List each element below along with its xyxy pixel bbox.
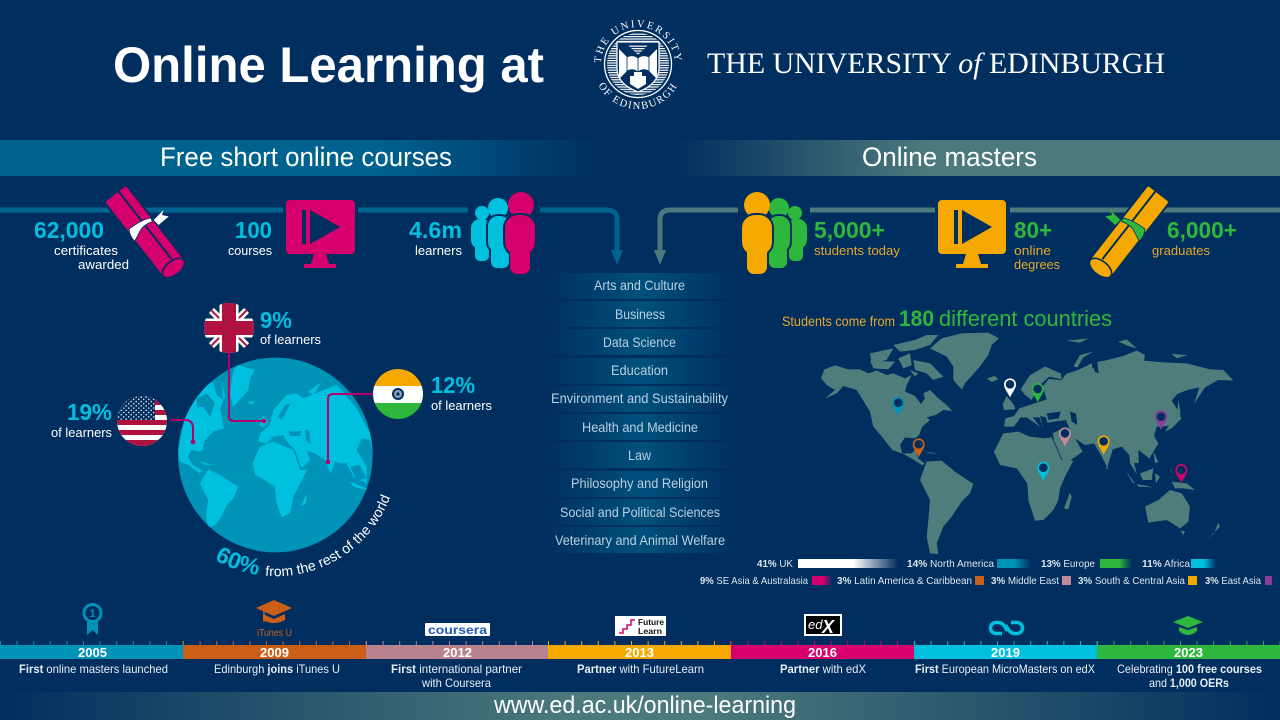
legend: student regions xyxy=(700,558,1272,587)
stat: 5,000+ students today: 5,000+ xyxy=(814,217,885,243)
icon: India flag xyxy=(373,369,423,419)
label: 19% of learners: 19% xyxy=(67,399,112,425)
milestone: 2005 xyxy=(0,645,183,676)
icon: group of three people, orange and green xyxy=(738,188,810,278)
panel: subject list: Social and Political Sciences xyxy=(560,504,720,520)
panel: subject list xyxy=(547,273,735,553)
panel: subject list: Education xyxy=(611,362,668,378)
icon: iTunes U cap xyxy=(256,600,292,639)
connector: UK to globe xyxy=(229,353,266,423)
milestone: 2016: Partner with edX xyxy=(780,662,866,676)
stat: 100 courses xyxy=(228,217,272,258)
legend: student regions: 41% UK xyxy=(757,558,793,570)
pin: Middle East xyxy=(1059,427,1071,447)
milestone: 2009 xyxy=(183,645,366,676)
legend: student regions: 9% SE Asia & Australasia xyxy=(700,575,808,587)
stat: 100 courses: courses xyxy=(228,243,272,258)
legend: student regions: 11% Africa xyxy=(1142,558,1190,570)
icon: pink diploma scroll xyxy=(103,175,200,284)
curved label: 60% from the rest of the world: 60% from the rest of the world xyxy=(217,494,390,576)
milestone: 2012: 2012 xyxy=(443,645,472,660)
stat: 62,000 certificates awarded: 62,000 xyxy=(34,217,104,243)
label: 9% of learners xyxy=(260,307,321,347)
milestone: 2005: 2005 xyxy=(78,645,107,660)
stat: 6,000+ graduates xyxy=(1152,217,1237,258)
banner: Free short online courses: Free short online courses xyxy=(160,142,452,172)
banner: Online masters xyxy=(675,140,1280,176)
milestone: 2009: 2009 xyxy=(260,645,289,660)
legend: student regions: 14% North America xyxy=(907,558,994,570)
milestone: 2019 xyxy=(914,645,1097,676)
icon: pink monitor with play button xyxy=(283,197,358,268)
heading: students come from 180 different countries: Students come from xyxy=(782,313,895,329)
stat: 5,000+ students today: students today xyxy=(814,243,901,258)
label: 9% of learners: of learners xyxy=(260,332,321,347)
label: 12% of learners xyxy=(431,372,492,413)
banner: Free short online courses xyxy=(0,140,600,176)
logo: FutureLearn xyxy=(615,616,666,636)
world map: Americas and Greenland xyxy=(821,333,999,554)
label: 9% of learners: 9% xyxy=(260,307,292,333)
pin: East Asia xyxy=(1155,411,1167,430)
stat: 5,000+ students today xyxy=(814,217,901,258)
panel: subject list: Data Science xyxy=(603,334,676,350)
logo: edX: X xyxy=(821,617,835,637)
location pins xyxy=(892,378,1187,483)
icon: orange monitor with play button xyxy=(935,197,1010,268)
icon: chain link xyxy=(990,622,1023,634)
heading: students come from 180 different countries xyxy=(782,306,1112,331)
logo: edX xyxy=(804,614,842,637)
legend: student regions: 13% Europe xyxy=(1041,558,1095,570)
panel: subject list: Environment and Sustainability xyxy=(551,390,728,406)
icon: medal ribbon xyxy=(84,604,101,635)
logo: University of Edinburgh crest xyxy=(594,20,682,109)
title: Online Learning at: Online Learning at xyxy=(113,37,544,93)
stat: 4.6m learners: learners xyxy=(415,243,462,258)
stat: 80+ online degrees: degrees xyxy=(1014,257,1060,272)
stat: 62,000 certificates awarded xyxy=(34,217,129,272)
label: 19% of learners xyxy=(51,399,112,440)
milestone: 2013: 2013 xyxy=(625,645,654,660)
milestone: 2013 xyxy=(548,645,731,676)
stat: 80+ online degrees: online xyxy=(1014,243,1051,258)
banner: Online masters: Online masters xyxy=(862,142,1037,172)
icon: group of three people, cyan and pink xyxy=(468,188,540,278)
panel: subject list: Law xyxy=(628,447,652,463)
icon: orange diploma scroll xyxy=(1074,175,1171,284)
timeline xyxy=(0,600,1280,690)
label: 12% of learners: of learners xyxy=(431,398,492,413)
arrow: online masters line into subject list xyxy=(654,210,1280,265)
footer: website link: www.ed.ac.uk/online-learning xyxy=(493,692,796,719)
stat: 6,000+ graduates: 6,000+ xyxy=(1167,217,1237,243)
logo: FutureLearn: Learn xyxy=(638,627,662,636)
panel: subject list: Arts and Culture xyxy=(594,277,685,293)
icon: medal ribbon: 1 xyxy=(89,608,96,620)
milestone: 2012 xyxy=(366,645,548,690)
heading: students come from 180 different countries: different countries xyxy=(939,306,1112,331)
logo: FutureLearn: Future xyxy=(638,618,665,627)
stat: 62,000 certificates awarded: awarded xyxy=(78,257,129,272)
logo: University of Edinburgh crest: THE UNIVERSITY xyxy=(594,20,682,62)
milestone: 2005: First online masters launched xyxy=(19,662,168,676)
panel: subject list: Veterinary and Animal Welfare xyxy=(555,532,725,548)
milestone: 2023: 2023 xyxy=(1174,645,1203,660)
pin: North America xyxy=(892,397,904,416)
stat: 6,000+ graduates: graduates xyxy=(1152,243,1210,258)
stat: 80+ online degrees xyxy=(1014,217,1060,272)
stat: 80+ online degrees: 80+ xyxy=(1014,217,1052,243)
stat: 62,000 certificates awarded: certificates xyxy=(54,243,119,258)
connector: USA to globe xyxy=(170,420,195,444)
logo: University of Edinburgh crest: OF EDINBURGH xyxy=(600,82,677,109)
label: 19% of learners: of learners xyxy=(51,425,112,440)
panel: subject list: Business xyxy=(615,306,665,322)
footer: website link xyxy=(0,692,1280,720)
pin: Africa xyxy=(1037,462,1049,481)
panel: subject list: Health and Medicine xyxy=(582,419,698,435)
milestone: 2013: Partner with FutureLearn xyxy=(577,662,704,676)
panel: subject list: Philosophy and Religion xyxy=(571,475,708,491)
milestone: 2016: 2016 xyxy=(808,645,837,660)
stat: 4.6m learners: 4.6m xyxy=(409,217,462,243)
milestone: 2009: Edinburgh joins iTunes U xyxy=(214,662,340,676)
stat: 100 courses: 100 xyxy=(235,217,272,243)
icon: iTunes U cap: iTunes U xyxy=(257,628,292,639)
milestone: 2019: First European MicroMasters on edX xyxy=(915,662,1095,676)
milestone: 2012: First international partner xyxy=(391,662,522,676)
pin: SE Asia and Australasia xyxy=(1175,464,1187,483)
icon: US flag xyxy=(117,396,167,446)
world map: Europe, Africa, Asia and Oceania xyxy=(994,338,1233,540)
milestone: 2019: 2019 xyxy=(991,645,1020,660)
milestone: 2016 xyxy=(731,645,914,676)
milestone: 2023: Celebrating 100 free courses xyxy=(1117,662,1262,676)
heading: students come from 180 different countries: 180 xyxy=(899,306,934,331)
pin: Europe xyxy=(1032,383,1044,402)
icon: UK flag xyxy=(204,303,254,353)
milestone: 2023 xyxy=(1097,645,1280,690)
pin: UK xyxy=(1004,378,1016,397)
logo: edX: ed xyxy=(808,617,823,632)
milestone: 2012: with Coursera xyxy=(421,676,491,690)
logo: Coursera: coursera xyxy=(428,623,487,637)
legend: student regions: 3% South & Central Asia xyxy=(1078,575,1185,587)
milestone: 2023: and 1,000 OERs xyxy=(1149,676,1229,690)
legend: student regions: 3% Middle East xyxy=(991,575,1059,587)
label: 12% of learners: 12% xyxy=(431,372,475,398)
legend: student regions: 3% East Asia xyxy=(1205,575,1261,587)
pin: Latin America and Caribbean xyxy=(913,438,925,457)
stat: 4.6m learners xyxy=(409,217,462,258)
pin: South and Central Asia xyxy=(1098,435,1110,455)
connector: India to globe xyxy=(326,394,373,464)
arrow: free courses line into subject list xyxy=(0,210,623,265)
globe xyxy=(178,358,374,552)
legend: student regions: 3% Latin America & Caribbean xyxy=(837,575,972,587)
icon: green graduation cap xyxy=(1173,616,1203,635)
wordmark: The University of Edinburgh: THE UNIVERSITY of EDINBURGH xyxy=(707,47,1165,80)
